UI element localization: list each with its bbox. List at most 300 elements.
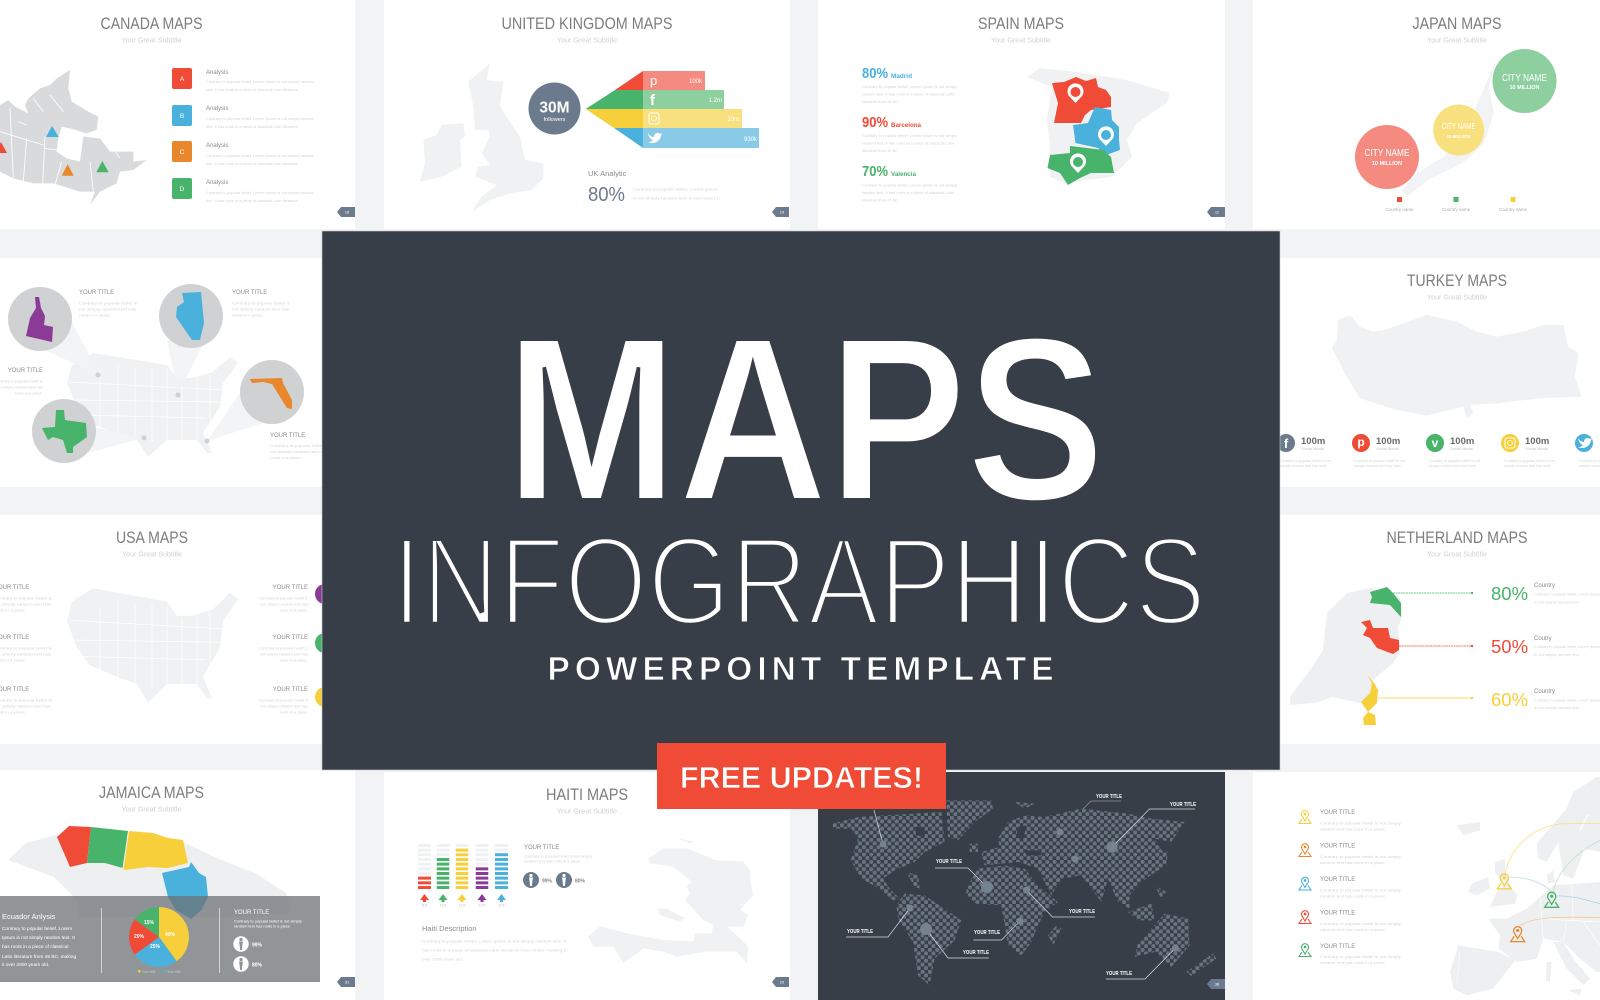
legend: Country name	[1385, 207, 1414, 212]
stat: Madrid: Madrid	[891, 73, 912, 80]
stat: Barcelona: 90%	[862, 115, 888, 131]
list item: green: YOUR TITLE	[1320, 944, 1355, 950]
right text blocks: Contrary to popular belief is	[259, 698, 308, 702]
page tag: 18	[345, 210, 350, 214]
page tag	[1207, 979, 1225, 989]
page tag: 19	[780, 210, 785, 214]
stat: Valencia	[862, 164, 957, 202]
icon: Illinois	[159, 284, 223, 348]
Haiti description: over 2000 years old.	[422, 956, 463, 962]
Haiti description: Contrary to popular belief, Lorem Ipsum is not simply random text. It	[422, 938, 567, 944]
your title text: Contrary to popular belief is not simple	[234, 920, 302, 924]
analysis text: Ipsum is not simply random text. It	[2, 935, 75, 941]
right text blocks: not simply random text has	[260, 704, 308, 708]
bar icons: 11%	[479, 904, 485, 908]
beams to highlighted states	[45, 322, 263, 453]
list item: red: YOUR TITLE	[1320, 910, 1355, 916]
Haiti description: Haiti Description	[422, 924, 477, 933]
item B: Contrary to popular belief, Lorem Ipsum is not simply random	[206, 116, 315, 121]
pin: red	[1068, 83, 1084, 103]
callout labels: YOUR TITLE	[974, 930, 1001, 936]
pin: blue	[1098, 126, 1114, 146]
Haiti description	[422, 924, 567, 962]
bar: Instagram 20m: 20m	[727, 117, 739, 123]
list item: blue: random text has roots in a place.	[1320, 894, 1386, 898]
followers circle: followers	[544, 117, 566, 123]
stat: Barcelona: literature from 45 BC	[862, 148, 898, 153]
right text blocks	[259, 585, 308, 714]
right text blocks: YOUR TITLE	[273, 635, 308, 641]
callout text 2	[232, 290, 290, 318]
your title text: YOUR TITLE	[234, 910, 269, 916]
item B: text. It has roots in a piece of classical Latin literature	[206, 124, 299, 129]
region: red	[1361, 620, 1399, 654]
heading: Netherland maps: NETHERLAND MAPS	[1386, 529, 1528, 547]
stat: Valencia: 70%	[862, 164, 888, 180]
item A: Contrary to popular belief, Lorem Ipsum is not simply random	[206, 79, 315, 84]
region: red	[57, 826, 91, 867]
map: USA	[67, 588, 238, 703]
stat: 80%: 80%	[1491, 583, 1528, 604]
subtitle: Your Great Subtitle	[557, 806, 617, 816]
bubble: yellow city	[1433, 104, 1484, 156]
callout text 3: YOUR TITLE	[8, 368, 43, 374]
callout text 4: YOUR TITLE	[270, 433, 305, 439]
panel: USA states highlight slide	[0, 258, 328, 487]
item A	[172, 68, 315, 92]
bubble: red city	[1355, 125, 1419, 189]
page tag: 31	[345, 980, 350, 984]
legend: Country name	[1499, 207, 1528, 212]
bubble: green city	[1492, 49, 1556, 113]
stat: 60%: 60%	[1491, 689, 1528, 710]
followers circle	[528, 82, 580, 134]
bubble: red city: CITY NAME	[1364, 148, 1410, 159]
list item: orange: YOUR TITLE	[1320, 844, 1355, 850]
bubble: red city: 10 MILLION	[1372, 161, 1402, 167]
analysis text	[2, 912, 76, 968]
map: Spain base	[1027, 68, 1170, 183]
connector: yellow	[1378, 697, 1473, 699]
heading: Haiti maps: HAITI MAPS	[546, 786, 628, 804]
your title text	[234, 910, 302, 928]
region: red	[1052, 77, 1111, 123]
icon: Texas	[32, 399, 96, 463]
right text blocks: YOUR TITLE	[273, 585, 308, 591]
item D: Contrary to popular belief, Lorem Ipsum is not simply random	[206, 190, 315, 195]
panel: Japan maps slide	[1253, 0, 1600, 229]
analysis text: Contrary to popular belief, Lorem	[2, 926, 72, 932]
callout text 3: roots in a place.	[15, 390, 43, 396]
map pin: yellow	[1497, 874, 1511, 889]
bar: Pinterest 100k	[643, 71, 705, 90]
bubble: green city: 10 MILLION	[1510, 85, 1540, 91]
callout text 1: Contrary to popular belief is	[79, 300, 137, 306]
marker: green triangle	[96, 161, 109, 172]
page tag	[1207, 207, 1225, 217]
heading: Spain maps: SPAIN MAPS	[978, 15, 1064, 33]
bar chart	[424, 843, 502, 889]
heading: United Kingdom maps: UNITED KINGDOM MAPS	[502, 15, 672, 33]
list item: orange: Contrary to popular belief is not simply	[1320, 854, 1401, 859]
list item: red: random text has roots in a place.	[1320, 927, 1386, 932]
social: Vimeo	[1426, 434, 1481, 468]
bar icons: 11%	[459, 904, 465, 908]
map: dotted world	[833, 800, 1216, 985]
inland seas	[915, 825, 1041, 855]
connector: green	[1393, 592, 1473, 594]
bar icons: 11%	[421, 904, 428, 908]
panel: Canada maps slide	[0, 0, 355, 229]
stat: Valencia: Contrary to popular belief, Lorem Ipsum is not simply	[862, 182, 957, 188]
subtitle: Your Great Subtitle	[1427, 550, 1487, 558]
region: yellow	[124, 831, 188, 870]
page tag	[337, 977, 355, 987]
page tag	[772, 977, 789, 987]
item A: text. It has roots in a piece of classical Latin literature	[206, 87, 299, 92]
map: Canada	[0, 70, 147, 205]
region: green	[87, 827, 128, 868]
icon: Idaho	[8, 287, 72, 351]
pie chart: 15%	[144, 920, 155, 926]
analysis text: Latin literature from 45 BC, making	[2, 954, 76, 960]
stat: 99%	[523, 872, 553, 888]
social: Facebook	[1277, 434, 1332, 468]
callout text 2: Contrary to popular belief is	[232, 300, 290, 306]
item B	[172, 105, 315, 129]
bar icons: 11%	[498, 904, 505, 908]
callout labels	[847, 794, 1197, 977]
analysis text: has roots in a piece of classical	[2, 944, 68, 950]
region: blue	[162, 862, 208, 919]
item D: Analysis	[206, 180, 228, 186]
stat: 80%	[1491, 583, 1600, 604]
marker: orange triangle	[62, 164, 74, 176]
stat: 80%	[556, 872, 586, 888]
callout labels: YOUR TITLE	[1096, 794, 1123, 800]
item D: D	[180, 186, 185, 193]
UK analytic stat	[588, 169, 719, 206]
social: Facebook: Social Media	[1301, 446, 1325, 451]
callout text 1: YOUR TITLE	[79, 290, 114, 296]
page tag: 20	[780, 980, 785, 984]
right text blocks: not simply random text has	[260, 652, 308, 656]
callout text 1: not simply random text has	[79, 306, 136, 312]
icon: Florida	[240, 360, 304, 424]
icons: coloured circles	[315, 584, 335, 707]
callout text 1	[79, 290, 137, 318]
location dots	[880, 828, 1179, 952]
callout text 4	[270, 433, 328, 460]
social: Instagram: simply random text has roots	[1504, 463, 1551, 468]
right text blocks: not simply random text has	[260, 602, 308, 606]
map: Netherlands base	[1290, 588, 1402, 705]
list item: green: Contrary to popular belief is not simply	[1320, 954, 1401, 959]
social: Instagram: Social Media	[1525, 446, 1549, 451]
list item: red: Contrary to popular belief is not simply	[1320, 921, 1401, 926]
map pin: green	[1545, 892, 1559, 907]
bar icons: 11%	[440, 904, 446, 908]
heading: USA maps: USA MAPS	[116, 529, 188, 547]
your title text: random text has roots in a piece	[234, 924, 290, 928]
item B: B	[180, 113, 184, 120]
stat: 60%: Country	[1534, 689, 1555, 695]
pie legend	[138, 970, 181, 974]
subtitle: Your Great Subtitle	[122, 36, 182, 44]
social: Pinterest: Social Media	[1376, 446, 1400, 451]
callout lines	[846, 801, 1195, 979]
pin: green	[1070, 153, 1086, 173]
map: Japan	[1402, 60, 1496, 197]
stat: 80%: is not simply random text	[1534, 600, 1580, 604]
item C: C	[180, 149, 185, 156]
social: Vimeo: simply random text has roots	[1429, 463, 1476, 468]
bar: Twitter 930k: 930k	[744, 137, 758, 143]
region: green	[1370, 587, 1401, 617]
social: Instagram: Contrary to popular belief is not	[1504, 458, 1556, 463]
UK analytic stat: UK Analytic	[588, 169, 627, 178]
callout text 4: Contrary to popular belief is	[270, 443, 328, 448]
social: Pinterest: simply random text has roots	[1354, 463, 1401, 468]
bar: Facebook 1.2m: 1.2m	[709, 98, 722, 104]
stat: Madrid: random text. It has roots in a piece of classical Latin	[862, 92, 954, 96]
bar: Pinterest 100k: p	[650, 73, 657, 88]
page tag: 36	[1215, 982, 1220, 986]
stat: Valencia: Valencia	[891, 171, 916, 178]
panel: Europe map slide	[1253, 772, 1600, 1000]
stat: 80%: Country	[1534, 583, 1555, 589]
bar: Instagram 20m	[643, 109, 742, 128]
map: USA with states	[67, 353, 238, 457]
arrow funnel	[586, 71, 643, 148]
location dots	[96, 372, 210, 444]
pie chart: 20%	[134, 934, 145, 940]
panel: Haiti maps slide	[384, 772, 790, 1000]
social: Instagram: 100m	[1525, 436, 1549, 447]
region: yellow	[1361, 675, 1378, 725]
map: UK and Ireland	[420, 63, 543, 212]
stat: 99%	[233, 936, 263, 952]
stat: 99%: 99%	[542, 878, 553, 884]
subtitle: PowerPoint template: POWERPOINT TEMPLATE	[548, 651, 1054, 688]
item C: Contrary to popular belief, Lorem Ipsum is not simply random	[206, 153, 315, 158]
list item: green	[1299, 944, 1401, 965]
region: green	[1048, 146, 1114, 185]
list item: yellow: random text has roots in a place.	[1320, 826, 1386, 832]
callout labels: YOUR TITLE	[936, 859, 963, 865]
bar icons	[420, 894, 506, 908]
callout text 3	[0, 368, 43, 396]
social: Vimeo: Social Media	[1450, 446, 1474, 451]
social: Pinterest: 100m	[1376, 436, 1400, 447]
stat: 80%	[233, 956, 263, 972]
social: Pinterest: Contrary to popular belief is not	[1354, 458, 1406, 463]
page tag	[337, 207, 355, 217]
panel: Netherland maps slide	[1253, 515, 1600, 744]
social: Facebook: 100m	[1301, 436, 1325, 447]
stat: Valencia: random text. It has roots in a piece of classical Latin	[862, 190, 954, 195]
analysis text: Ecuador Anlysis	[2, 912, 56, 921]
list item: yellow	[1299, 810, 1401, 832]
marker: blue triangle	[46, 126, 59, 137]
stat: Barcelona: Contrary to popular belief, Lorem Ipsum is not simply	[862, 133, 957, 138]
panel: Spain maps slide	[818, 0, 1225, 229]
stat: Madrid	[862, 66, 957, 104]
followers circle: 30M	[539, 100, 570, 116]
legend: Country name	[1442, 207, 1471, 212]
list item: yellow: Contrary to popular belief is not simply	[1320, 820, 1401, 826]
bar: Facebook 1.2m	[643, 90, 724, 109]
region: blue	[1073, 107, 1120, 155]
social: Vimeo: 100m	[1450, 436, 1474, 447]
list item: orange	[1299, 844, 1401, 865]
map pin: orange	[1511, 927, 1525, 942]
list item: red	[1299, 910, 1401, 932]
your title text: Contrary to popular belief is not simply	[524, 854, 592, 858]
callout labels: YOUR TITLE	[1106, 971, 1133, 977]
bar: Pinterest 100k: 100k	[689, 79, 703, 85]
bubble: green city: CITY NAME	[1502, 73, 1547, 84]
stat: 50%	[1491, 636, 1600, 657]
panel: USA maps slide	[0, 515, 335, 744]
list item: green: random text has roots in a place.	[1320, 960, 1386, 965]
item A: Analysis	[206, 70, 228, 76]
item C: Analysis	[206, 143, 228, 149]
your title text	[524, 845, 592, 864]
right text blocks: roots in a place.	[280, 658, 308, 662]
stat: Madrid: Contrary to popular belief, Lorem Ipsum is not simply	[862, 84, 957, 89]
pie legend: Your title	[142, 970, 156, 974]
stat: Barcelona	[862, 115, 957, 153]
social: Facebook: f	[1284, 436, 1289, 451]
right text blocks: Contrary to popular belief is	[259, 596, 308, 600]
subtitle: Your Great Subtitle	[1427, 36, 1487, 44]
UK analytic stat: Contrary to popular belief, Lorem Ipsum	[633, 186, 719, 192]
panel: Jamaica maps slide	[0, 770, 355, 1000]
callout text 4: roots in a place.	[270, 455, 302, 460]
subtitle: Your Great Subtitle	[991, 36, 1051, 44]
subtitle: Your Great Subtitle	[1427, 292, 1487, 302]
stat: Barcelona: random text. It has roots in a piece of classical Latin	[862, 140, 954, 146]
right text blocks: roots in a place.	[280, 710, 308, 714]
heading: Japan maps: JAPAN MAPS	[1412, 15, 1502, 33]
map: Jamaica base	[8, 835, 293, 917]
callout text 2: not simply random text has	[232, 306, 289, 312]
bar: Facebook 1.2m: f	[650, 92, 656, 109]
heading: Canada maps: CANADA MAPS	[100, 15, 202, 33]
badge: free updates	[657, 743, 946, 809]
list item: blue: YOUR TITLE	[1320, 877, 1355, 883]
list item: blue: Contrary to popular belief is not simply	[1320, 888, 1401, 892]
stat: Madrid: 80%	[862, 66, 888, 82]
stat: 80%: 80%	[575, 878, 586, 884]
item D: text. It has roots in a piece of classical Latin literature	[206, 198, 299, 203]
social: Pinterest	[1352, 434, 1406, 468]
UK analytic stat: is not simply random text. It has roots in	[633, 196, 718, 200]
UK analytic stat: 80%	[588, 184, 625, 206]
pie chart: 25%	[150, 944, 161, 950]
pie chart: 40%	[165, 932, 176, 938]
central dark title panel	[322, 231, 1280, 770]
social: Pinterest: p	[1357, 435, 1365, 449]
callout labels: YOUR TITLE	[847, 929, 874, 935]
social: Vimeo: v	[1432, 436, 1439, 450]
callout labels: YOUR TITLE	[1069, 909, 1096, 915]
item C: text. It has roots in a piece of classical Latin literature	[206, 161, 299, 166]
item A: A	[180, 76, 185, 83]
heading: Jamaica maps: JAMAICA MAPS	[99, 784, 204, 802]
stat: Valencia: literature from 45 BC	[862, 198, 898, 202]
left text blocks	[0, 585, 52, 714]
callout text 1: roots in a place.	[79, 312, 111, 318]
stat: 60%	[1491, 689, 1600, 710]
map: Europe	[1450, 777, 1600, 995]
page tag	[772, 207, 789, 217]
your title text: YOUR TITLE	[524, 845, 559, 851]
callout text 2: roots in a place.	[232, 312, 264, 318]
pie chart	[129, 907, 189, 967]
stat: 50%: Coutry	[1534, 636, 1552, 642]
callout labels: YOUR TITLE	[963, 950, 990, 956]
bubble: yellow city: 10 MILLION	[1447, 134, 1471, 139]
stat: 99%: 99%	[252, 942, 263, 948]
badge: free updates: FREE UPDATES!	[680, 761, 923, 795]
bar: Twitter 930k	[643, 128, 759, 148]
social: Facebook: simply random text has roots	[1280, 463, 1327, 468]
title: INFOGRAPHICS: INFOGRAPHICS	[392, 512, 1206, 652]
analysis text: it over 2000 years old.	[2, 962, 49, 968]
stat: 60%: is not simply random text	[1534, 705, 1580, 710]
callout text 4: not simply random text has	[270, 449, 327, 454]
Haiti description: has roots in a piece of classical Latin literature from 45 BC, making it	[422, 948, 567, 952]
panel: United Kingdom maps slide	[384, 0, 790, 229]
subtitle: Your Great Subtitle	[557, 36, 617, 44]
social: Vimeo: Contrary to popular belief is not	[1429, 458, 1481, 463]
list item: orange: random text has roots in a place.	[1320, 860, 1386, 865]
heading: Turkey maps: TURKEY MAPS	[1407, 272, 1507, 290]
subtitle: Your Great Subtitle	[122, 550, 182, 558]
stat: 50%: is not simply random text	[1534, 652, 1580, 657]
grey analysis overlay	[0, 896, 320, 982]
right text blocks: YOUR TITLE	[273, 687, 308, 693]
legend	[1385, 197, 1528, 212]
your title text: random text has roots in a piece	[524, 858, 581, 864]
title: MAPS: MAPS	[505, 288, 1105, 550]
map: Haiti	[588, 838, 753, 963]
social: Facebook: Contrary to popular belief is not	[1280, 458, 1332, 463]
list item: blue	[1299, 877, 1401, 898]
callout text 2: YOUR TITLE	[232, 290, 267, 296]
pie legend: Your title	[167, 970, 181, 974]
stat: Madrid: literature from 45 BC	[862, 99, 898, 104]
stat: Barcelona: Barcelona	[891, 122, 921, 129]
item B: Analysis	[206, 106, 228, 112]
social: Twitter	[1575, 434, 1600, 468]
right text blocks: Contrary to popular belief is	[259, 646, 308, 650]
map: Turkey	[1332, 315, 1582, 418]
bubble: yellow city: CITY NAME	[1442, 121, 1476, 131]
item C	[172, 141, 315, 166]
marker: red triangle	[0, 142, 7, 153]
item D	[172, 178, 315, 203]
page tag: 11	[1215, 210, 1220, 214]
stat: 50%: 50%	[1491, 636, 1528, 657]
subtitle: Your Great Subtitle	[122, 804, 182, 814]
right text blocks: roots in a place.	[280, 608, 308, 612]
connector: red	[1399, 645, 1473, 647]
list item: yellow: YOUR TITLE	[1320, 810, 1355, 816]
stat: 80%: 80%	[252, 962, 263, 968]
